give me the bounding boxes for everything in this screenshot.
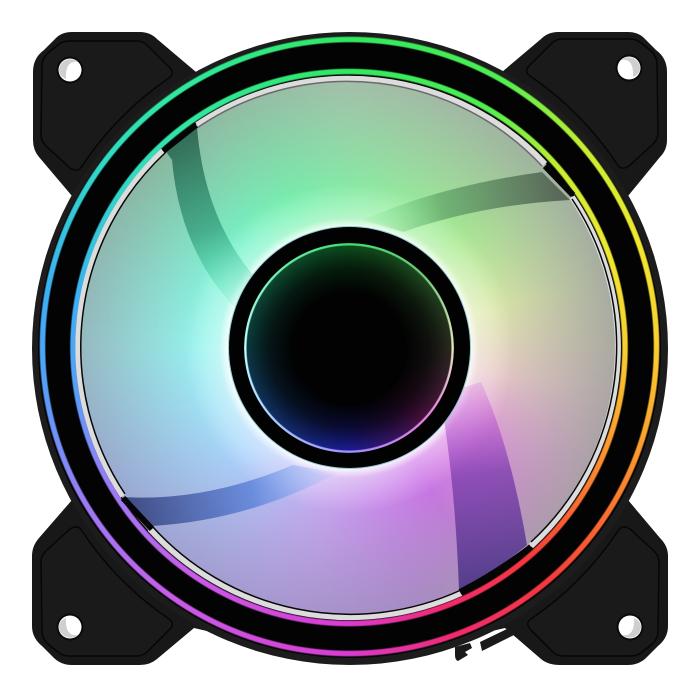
- inner LED ring: [70, 68, 628, 627]
- impeller disk colour wash: [77, 78, 619, 618]
- blade: bottom left: [123, 465, 337, 526]
- hub LED ring: [244, 243, 454, 453]
- blade: top left: [165, 127, 262, 308]
- outer LED ring: [39, 36, 660, 657]
- blade: bottom right: [440, 382, 527, 590]
- blade: top right: [363, 172, 570, 232]
- hub black cap: [229, 227, 470, 468]
- rim: grey and white arcs: [78, 79, 618, 617]
- rim: thin black line: [81, 81, 617, 614]
- black ring band: [38, 37, 661, 658]
- hub inner well glow: [246, 245, 452, 451]
- black blade-tip gaps: [123, 125, 573, 592]
